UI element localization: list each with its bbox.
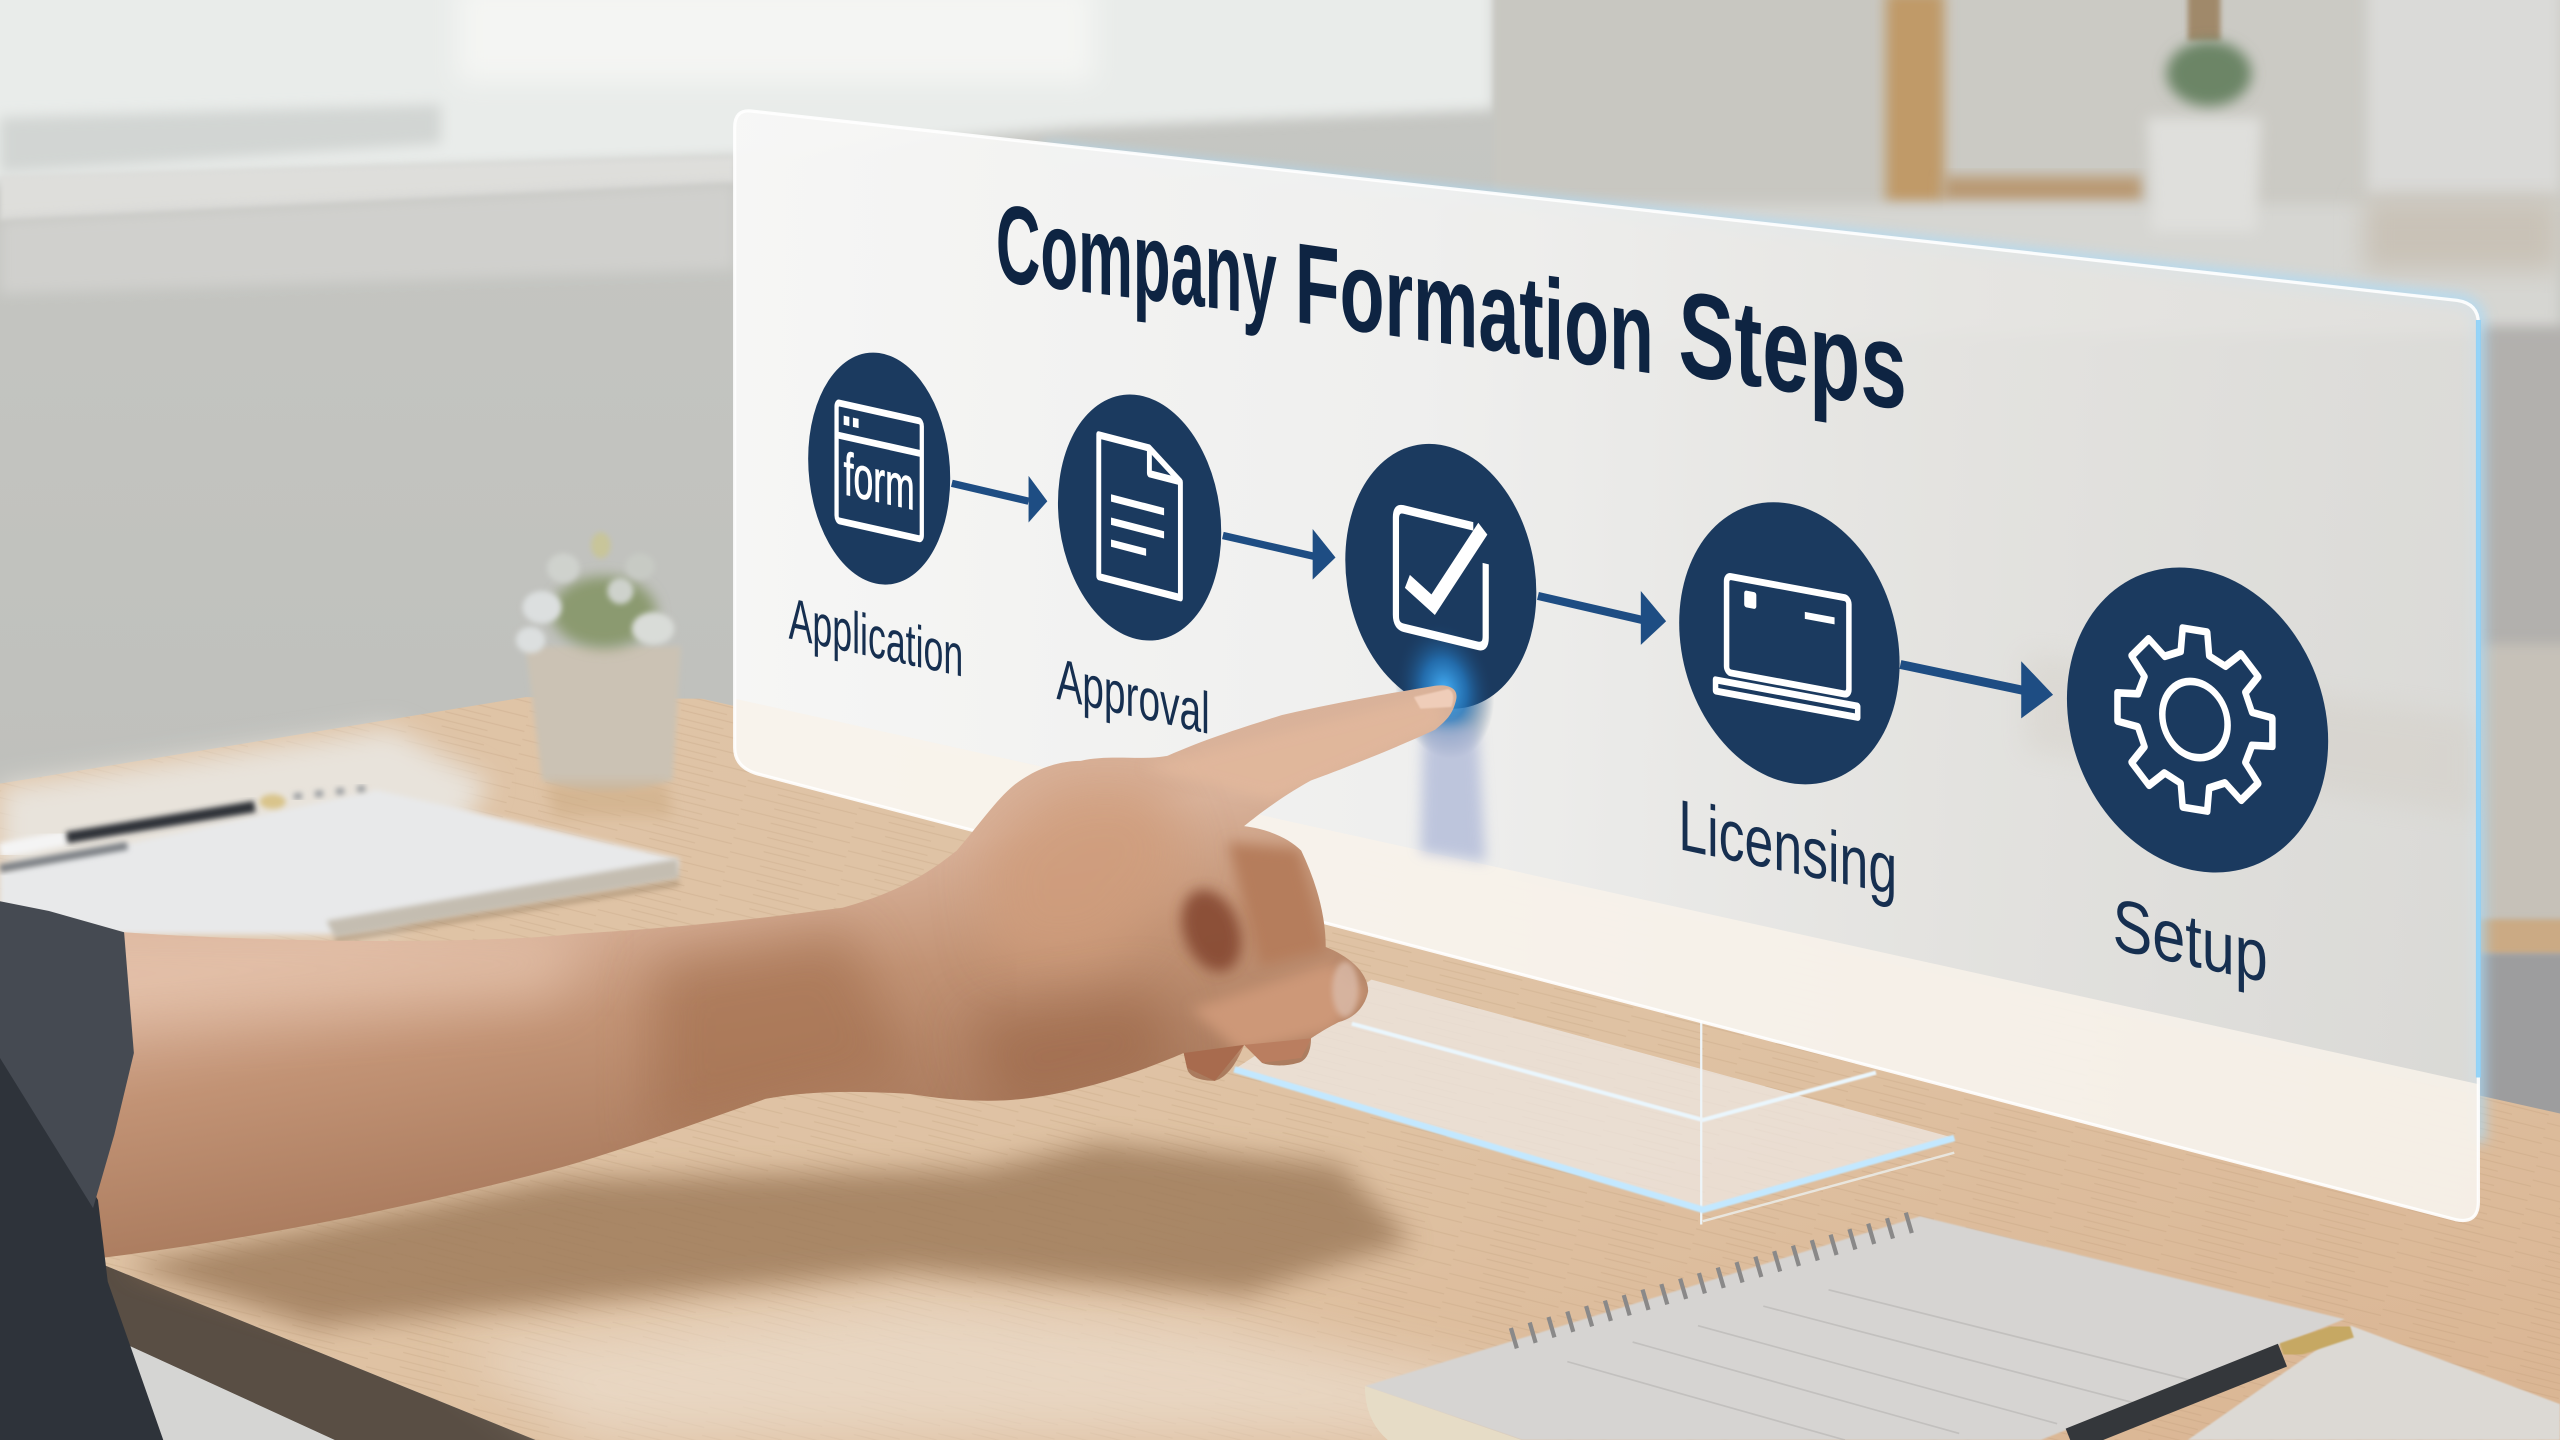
left notebook with pen — [0, 787, 679, 940]
label: Approval: Approval — [1056, 645, 1210, 747]
title: Company Formation Steps: Company — [996, 180, 1277, 340]
step 1: application icon circle — [808, 343, 950, 594]
title: Company Formation Steps: Steps — [1678, 265, 1907, 436]
step 3: checkbox icon circle with touch glow — [1345, 429, 1536, 774]
label: Licensing: Licensing — [1678, 785, 1897, 911]
label: Setup: Setup — [2113, 882, 2268, 999]
hand and forearm pointing at panel — [65, 685, 1457, 1260]
glass stand — [1234, 980, 1954, 1224]
arrow: review to licensing — [1538, 591, 1666, 645]
shirt sleeve — [0, 901, 134, 1208]
step 4: licensing laptop icon circle — [1679, 483, 1900, 803]
title: Company Formation Steps: Formation — [1295, 219, 1654, 399]
step 5: setup gear icon circle — [2067, 548, 2328, 892]
desk — [0, 697, 2560, 1440]
potted plant — [516, 532, 681, 816]
arrow: approval to review — [1223, 529, 1336, 580]
touch reflection under checkbox — [1420, 727, 1486, 862]
label: Application: Application — [789, 585, 963, 690]
arrow: application to approval — [952, 476, 1047, 522]
step 2: approval document icon circle — [1058, 381, 1221, 654]
title: Company Formation Steps — [996, 180, 1907, 436]
step 1: application icon circle: form — [844, 440, 915, 523]
person: dark torso — [0, 1029, 163, 1440]
arrow: licensing to setup — [1900, 661, 2053, 718]
right notebook with spiral and pen — [1365, 1216, 2560, 1440]
panel: holographic glass screen — [735, 111, 2478, 1220]
hand shadow on desk — [124, 1143, 1412, 1327]
